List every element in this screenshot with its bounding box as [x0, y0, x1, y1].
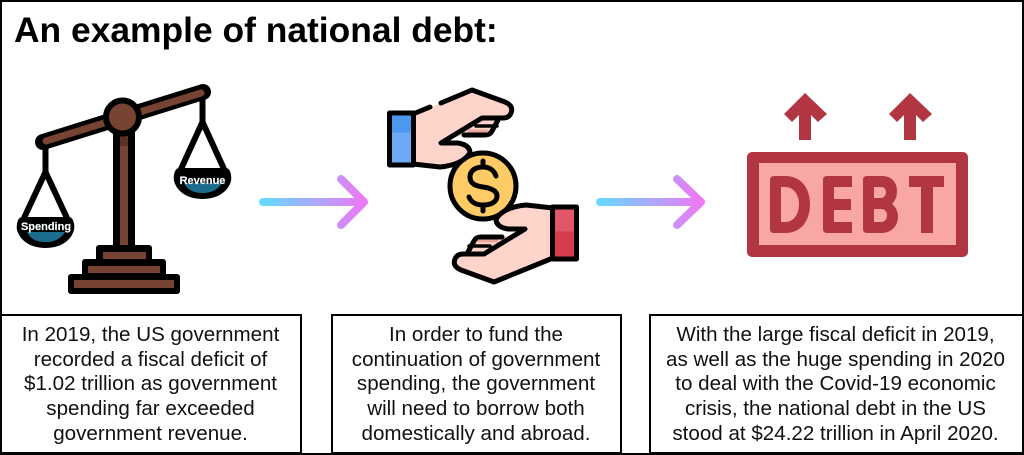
panel: national debt — [650, 315, 1023, 453]
up arrows — [784, 93, 932, 140]
coin — [450, 153, 516, 219]
arrow: funding to debt — [600, 179, 701, 225]
panel: fiscal deficit: $1.02 trillion as government — [24, 372, 277, 395]
icon: balance scale with spending heavier than revenue — [17, 92, 231, 294]
panel: borrowing — [332, 315, 621, 453]
panel: fiscal deficit: In 2019, the US government — [22, 323, 280, 346]
debt lettering — [770, 176, 944, 233]
panel: fiscal deficit — [1, 315, 301, 453]
panel: borrowing: continuation of government — [352, 348, 600, 371]
icon: hands exchanging a dollar coin — [390, 90, 576, 282]
icon: rising debt sign — [747, 93, 968, 257]
label: spending: Spending — [21, 221, 71, 233]
panel: fiscal deficit: government revenue. — [53, 422, 248, 445]
label: revenue: Revenue — [180, 175, 225, 187]
panel: borrowing: domestically and abroad. — [362, 422, 590, 445]
panel: national debt: to deal with the Covid-19 economic — [675, 372, 996, 395]
receiving hand with red cuff — [454, 205, 576, 282]
panel: fiscal deficit: spending far exceeded — [46, 397, 255, 420]
giving hand with blue cuff — [390, 90, 512, 167]
panel: borrowing: In order to fund the — [389, 323, 563, 346]
panel: borrowing: will need to borrow both — [366, 397, 585, 420]
panel: national debt: With the large fiscal deficit in 2019, — [676, 323, 995, 346]
panel: fiscal deficit: recorded a fiscal deficit of — [34, 348, 268, 371]
panel: national debt: as well as the huge spending in 2020 — [666, 348, 1005, 371]
debt sign board — [747, 152, 968, 257]
panel: borrowing: spending, the government — [357, 372, 595, 395]
panel: national debt: stood at $24.22 trillion in April 2020. — [672, 422, 999, 445]
title: An example of national debt: — [14, 10, 498, 50]
arrow: scale to funding — [263, 179, 364, 225]
panel: national debt: crisis, the national debt in the US — [685, 397, 986, 420]
